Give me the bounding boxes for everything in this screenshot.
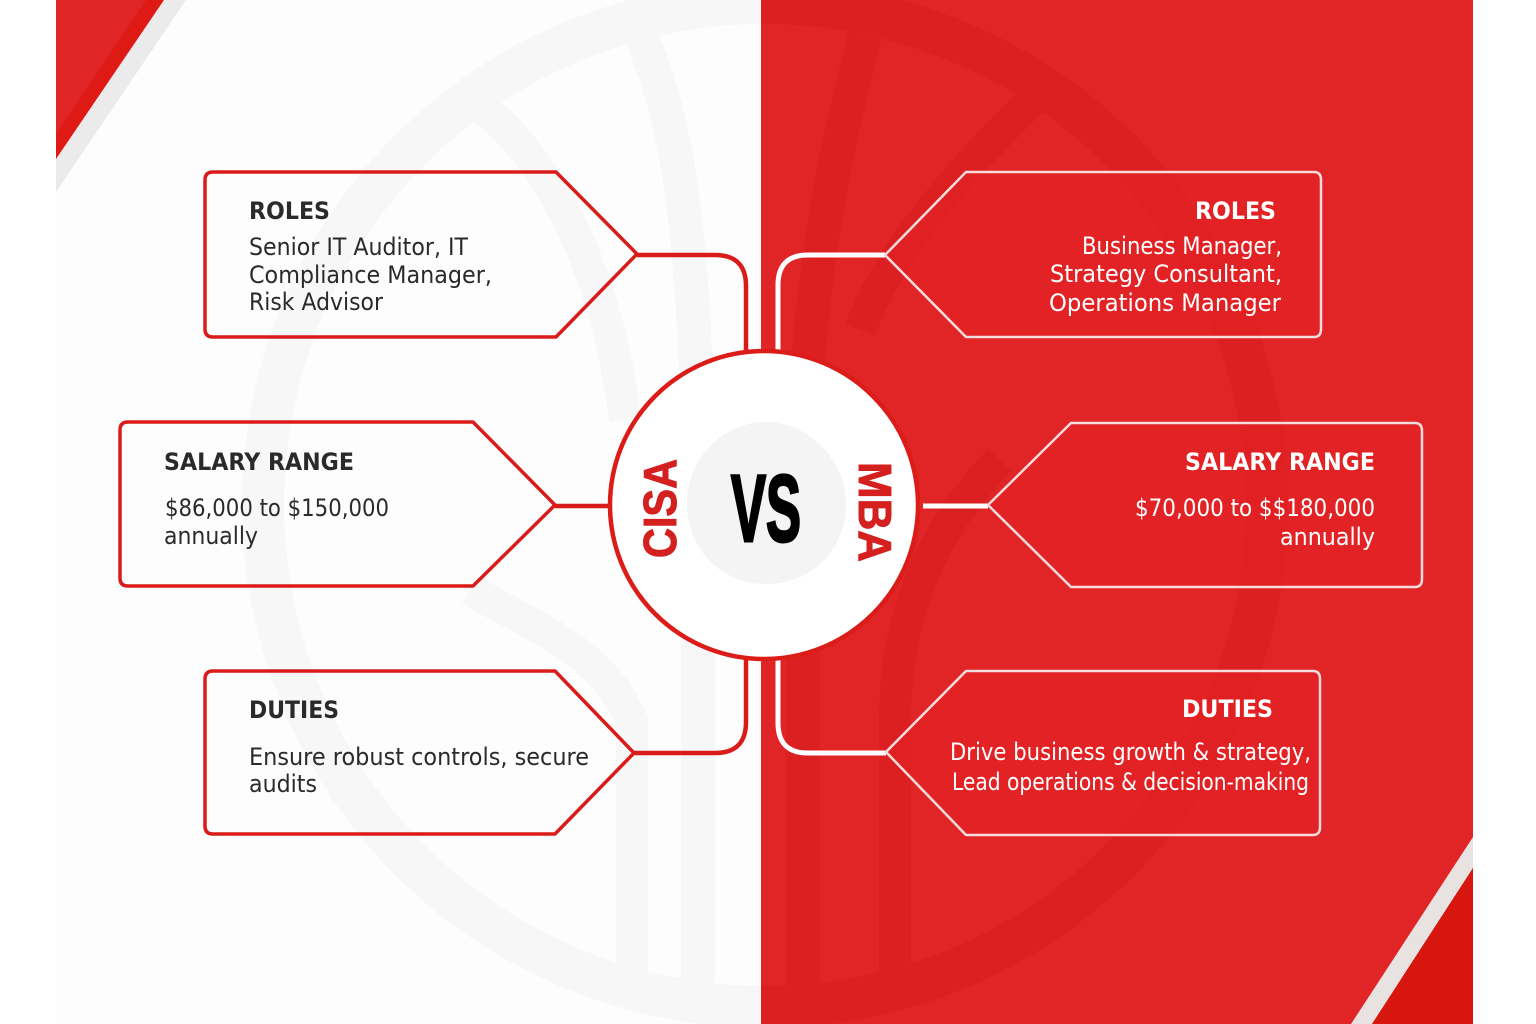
text: MBA duties list: Drive business growth & strategy, [950,738,1311,766]
text: MBA roles list [1049,232,1282,317]
panel: MBA roles [885,172,1321,337]
center blob [687,422,846,584]
text: MBA salary value: $70,000 to $$180,000 [1135,494,1375,522]
center badge: VS circle [610,351,918,659]
panel: MBA duties [886,671,1320,835]
text: MBA duties list [950,738,1311,796]
text: CISA roles list [249,233,492,316]
heading: MBA salary: SALARY RANGE [1185,448,1375,476]
text: CISA roles list: Risk Advisor [249,288,383,316]
text: MBA salary value: annually [1280,523,1375,551]
text: CISA duties list [249,743,589,798]
label: CISA: CISA [634,459,686,558]
panel: CISA background [56,0,761,1024]
text: MBA roles list: Strategy Consultant, [1050,260,1282,288]
text: MBA roles list: Business Manager, [1082,232,1282,260]
heading: MBA duties: DUTIES [1182,695,1273,723]
text: MBA roles list: Operations Manager [1049,289,1281,317]
heading: CISA roles: ROLES [249,197,330,225]
heading: CISA duties: DUTIES [249,696,339,724]
label: VS: VS [731,456,801,562]
heading: MBA roles: ROLES [1195,197,1276,225]
text: CISA duties list: Ensure robust controls, secure [249,743,589,771]
panel: CISA duties [205,671,634,834]
panel: CISA salary [120,422,555,586]
panel: CISA roles [205,172,637,337]
connectors: MBA side [778,255,988,753]
text: CISA roles list: Senior IT Auditor, IT [249,233,468,261]
text: CISA salary value [164,494,389,550]
text: MBA duties list: Lead operations & decision-making [952,768,1309,796]
corner: top-left decoration [56,0,186,192]
heading: CISA salary: SALARY RANGE [164,448,354,476]
text: CISA duties list: audits [249,770,317,798]
text: MBA salary value [1135,494,1375,551]
panel: MBA salary [988,423,1422,587]
text: CISA roles list: Compliance Manager, [249,261,492,289]
watermark: right globe [263,3,1267,1007]
corner: bottom-right decoration [1351,837,1473,1024]
text: CISA salary value: annually [164,522,258,550]
text: CISA salary value: $86,000 to $150,000 [165,494,389,522]
label: MBA: MBA [849,462,901,562]
connectors: CISA side [555,255,746,753]
watermark: left globe [263,3,1267,1007]
panel: MBA background [761,0,1473,1024]
